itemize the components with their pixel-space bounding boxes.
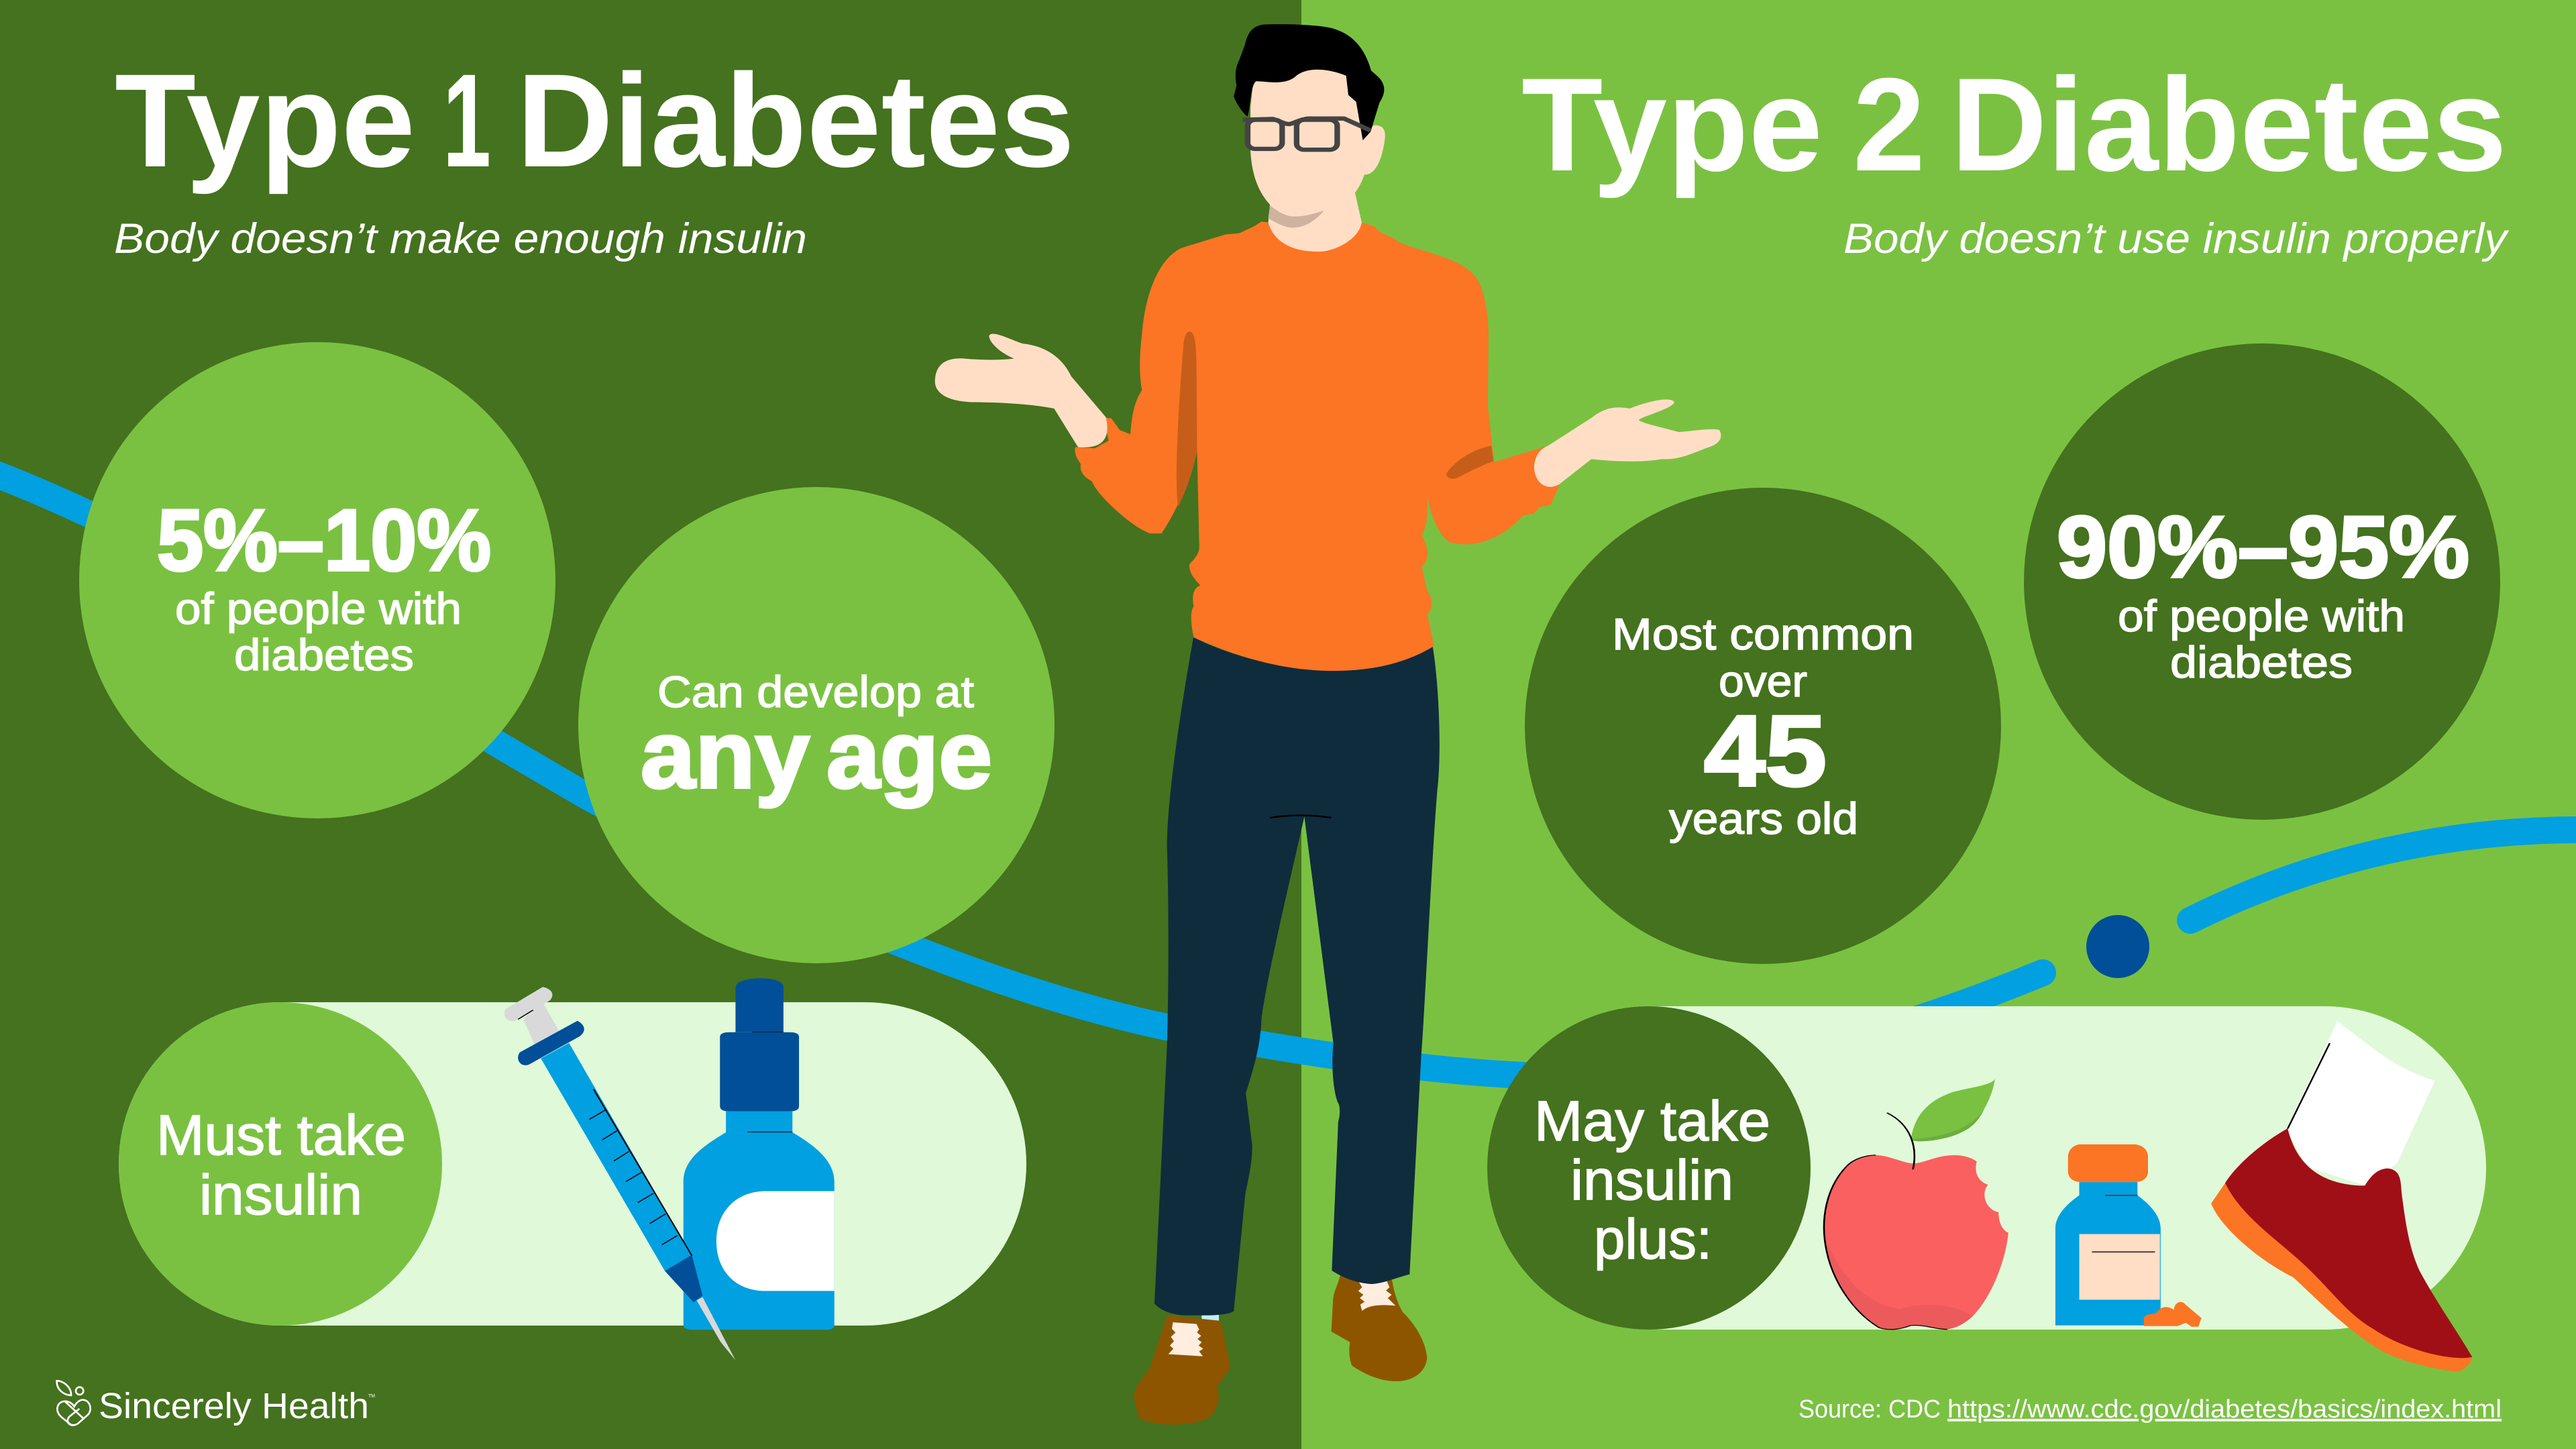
pill: may take insulin plus xyxy=(1487,1006,2486,1330)
icon: syringe xyxy=(504,987,735,1360)
title: Type 1 Diabetes: Type xyxy=(115,46,415,195)
pill label: May take xyxy=(1534,1089,1770,1152)
figure: man shrugging xyxy=(935,24,1721,1425)
value: any age: any xyxy=(641,702,810,808)
caption: most common over xyxy=(1612,609,1914,706)
title: Type 1 Diabetes xyxy=(115,46,1075,195)
caption: most common over: over xyxy=(1719,656,1807,706)
pill: must take insulin xyxy=(119,1002,1026,1326)
icon: medicine bottle with pills xyxy=(2055,1144,2201,1327)
logo wordmark: Sincerely Health xyxy=(99,1386,369,1426)
title: Type 2 Diabetes: 2 xyxy=(1853,50,1925,199)
icon: insulin bottle xyxy=(684,978,835,1330)
stat circle: 90%-95% xyxy=(2024,343,2500,820)
subtitle: Type 2: Body doesn’t use insulin properly xyxy=(1843,215,2510,262)
icon: apple xyxy=(1824,1079,2008,1330)
pill label: Must take xyxy=(156,1104,406,1167)
pill label xyxy=(156,1104,406,1226)
title: Type 1 Diabetes: 1 xyxy=(443,46,491,195)
icon: shoe xyxy=(2211,1021,2472,1372)
caption: years old: years old xyxy=(1669,794,1858,843)
pill label: insulin xyxy=(1570,1148,1733,1212)
glucose dot xyxy=(2086,915,2149,978)
pill label: plus: xyxy=(1594,1208,1712,1271)
stat circle: 5%-10% xyxy=(79,342,555,818)
stat caption: diabetes xyxy=(234,630,414,680)
source citation: Source: CDC xyxy=(1799,1395,1941,1424)
value: 45: 45 xyxy=(1704,694,1827,807)
trademark: TM xyxy=(368,1394,375,1399)
subtitle: Type 1: Body doesn’t make enough insulin xyxy=(114,215,807,262)
value: any age xyxy=(641,702,992,808)
panel: Type 1 background xyxy=(0,0,1301,1449)
source citation xyxy=(1799,1395,2502,1424)
stat circle: most common over 45 xyxy=(1525,488,2001,964)
stat caption xyxy=(175,584,462,680)
stat caption: of people with xyxy=(175,584,462,633)
panel: Type 2 background xyxy=(1301,0,2576,1449)
title: Type 2 Diabetes: Type xyxy=(1521,50,1823,199)
stat value: 90%–95% xyxy=(2057,498,2469,596)
man: upper body xyxy=(935,24,1721,671)
stat value: 5%–10% xyxy=(157,491,491,589)
source URL: https://www.cdc.gov/diabetes/basics/index.html xyxy=(1947,1395,2502,1424)
stat caption xyxy=(2118,591,2405,687)
man: shoes and trousers xyxy=(1134,637,1440,1425)
stat circle: any age xyxy=(578,487,1055,963)
pill label: insulin xyxy=(199,1163,362,1226)
man: glasses xyxy=(1242,119,1371,150)
stat caption: of people with xyxy=(2118,591,2405,641)
stat caption: diabetes xyxy=(2170,637,2353,687)
blue glucose line xyxy=(0,468,2576,1077)
logo icon xyxy=(57,1381,91,1426)
title: Type 2 Diabetes xyxy=(1521,50,2507,199)
pill label xyxy=(1534,1089,1770,1271)
title: Type 1 Diabetes: Diabetes xyxy=(517,46,1075,195)
caption: can develop at: Can develop at xyxy=(657,667,974,716)
title: Type 2 Diabetes: Diabetes xyxy=(1951,50,2507,199)
value: any age: age xyxy=(826,702,992,808)
logo: Sincerely Health xyxy=(57,1381,375,1426)
caption: most common over: Most common xyxy=(1612,609,1914,659)
